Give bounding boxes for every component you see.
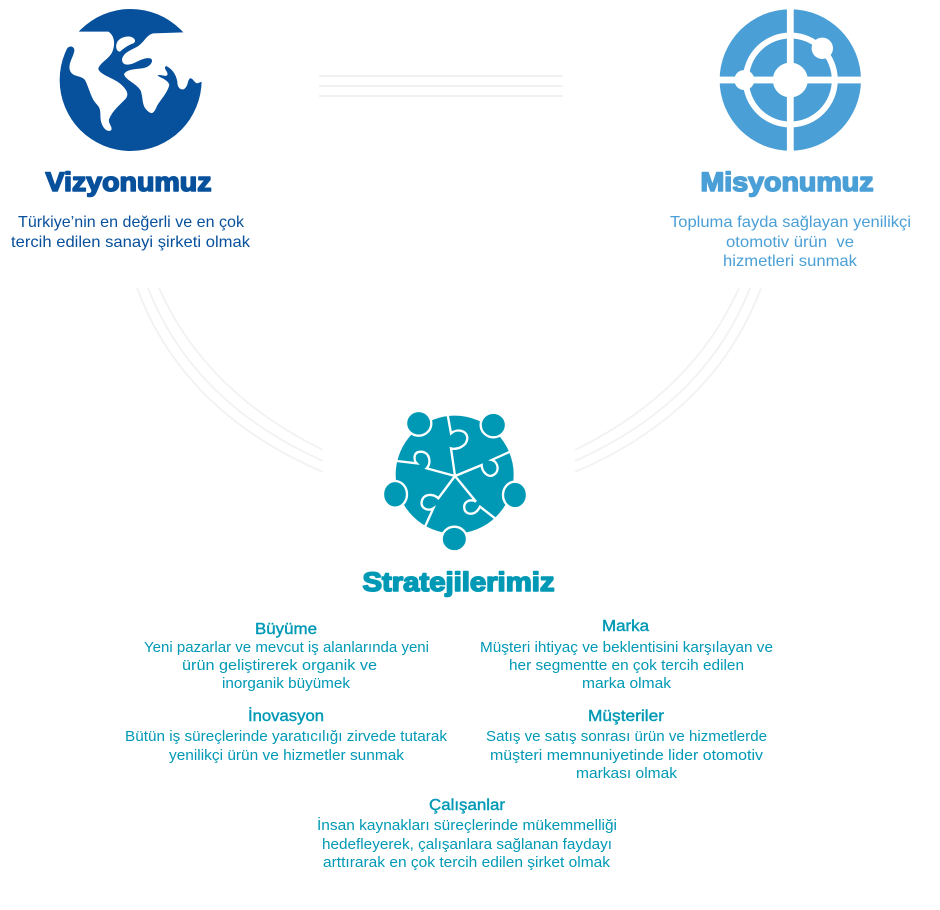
icon: puzzle team	[383, 411, 527, 551]
strategy: Çalışanlar: hedefleyerek, çalışanlara sağlanan faydayı	[322, 837, 612, 853]
strategy: İnovasyon: Bütün iş süreçlerinde yaratıcılığı zirvede tutarak	[125, 729, 448, 745]
strategy: İnovasyon	[125, 706, 448, 764]
strategy: Marka: marka olmak	[582, 676, 672, 692]
strategy: İnovasyon: İnovasyon	[248, 706, 324, 725]
strategy: İnovasyon: yenilikçi ürün ve hizmetler sunmak	[169, 748, 405, 764]
strategy: Büyüme: Yeni pazarlar ve mevcut iş alanlarında yeni	[144, 640, 429, 656]
connector: vision to mission lines	[319, 75, 563, 97]
strategy: Çalışanlar: arttırarak en çok tercih edilen şirket olmak	[323, 855, 611, 871]
strategy: Marka: Marka	[602, 618, 649, 635]
strategy: Müşteriler: markası olmak	[576, 766, 678, 782]
text: vision statement: tercih edilen sanayi şirketi olmak	[11, 234, 251, 251]
strategy: Büyüme: Büyüme	[255, 621, 317, 638]
strategy: Çalışanlar	[317, 797, 617, 871]
strategy: Çalışanlar: İnsan kaynakları süreçlerinde mükemmelliği	[317, 816, 617, 834]
strategy: Büyüme: ürün geliştirerek organik ve	[182, 658, 377, 674]
strategy: Büyüme: inorganik büyümek	[222, 676, 351, 692]
heading: Stratejilerimiz: Stratejilerimiz	[362, 567, 554, 597]
strategy: Müşteriler	[486, 708, 767, 782]
icon: mission target	[718, 8, 862, 152]
text: mission statement: hizmetleri sunmak	[723, 253, 858, 270]
text: mission statement: otomotiv ürün ve	[726, 234, 854, 251]
text: mission statement: Topluma fayda sağlayan yenilikçi	[670, 214, 911, 231]
text: mission statement	[670, 214, 911, 270]
icon: globe	[47, 9, 217, 151]
strategy: Marka: Müşteri ihtiyaç ve beklentisini karşılayan ve	[480, 640, 773, 656]
heading: Vizyonumuz: Vizyonumuz	[46, 167, 212, 197]
strategy: Müşteriler: Satış ve satış sonrası ürün ve hizmetlerde	[486, 729, 767, 745]
connector: vision to strategies arcs	[137, 288, 323, 472]
strategy: Büyüme	[144, 621, 429, 692]
text: vision statement: Türkiye’nin en değerli ve en çok	[18, 214, 245, 231]
strategy: Çalışanlar: Çalışanlar	[429, 797, 506, 814]
strategy: Müşteriler: Müşteriler	[588, 708, 665, 725]
heading: Misyonumuz: Misyonumuz	[700, 167, 874, 197]
strategy: Marka	[480, 618, 773, 692]
strategy: Marka: her segmentte en çok tercih edilen	[509, 658, 744, 674]
text: vision statement	[11, 214, 251, 251]
connector: mission to strategies arcs	[575, 288, 761, 472]
strategy: Müşteriler: müşteri memnuniyetinde lider otomotiv	[490, 748, 764, 764]
